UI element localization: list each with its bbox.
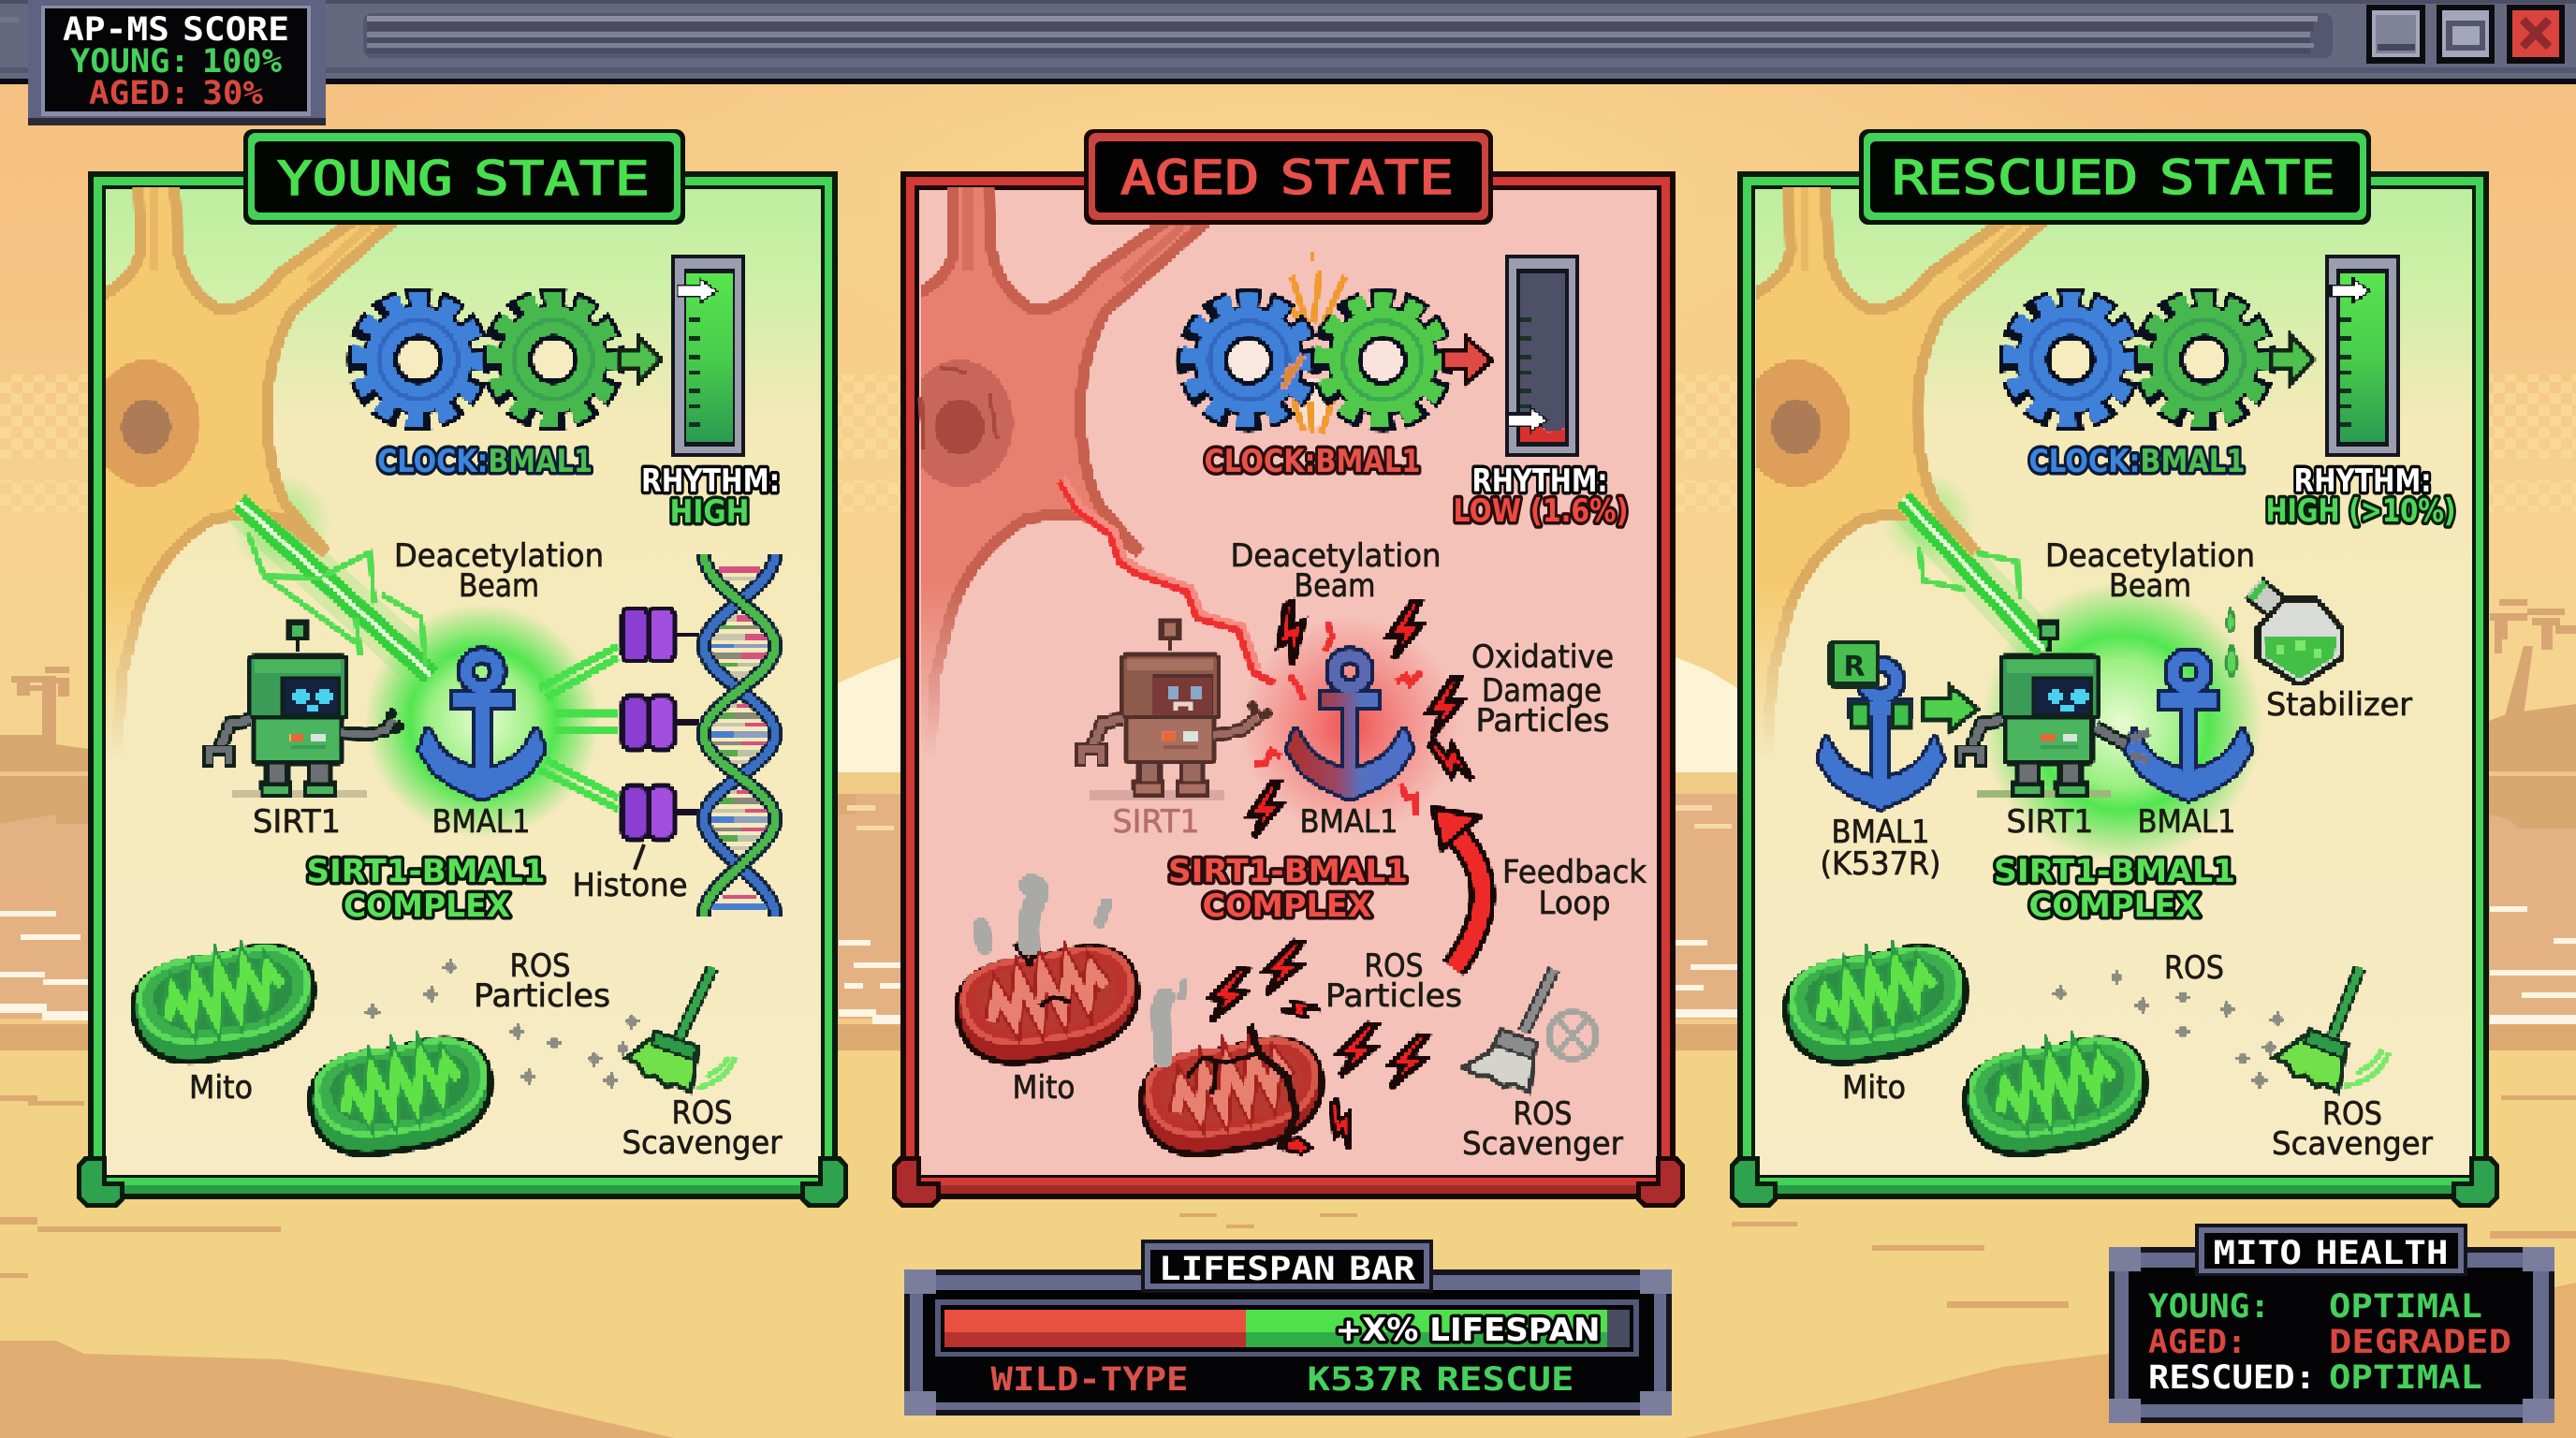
young labels: ROS — [672, 1094, 732, 1132]
rescued labels: RHYTHM: — [2293, 462, 2432, 500]
aged labels: Particles — [1475, 702, 1610, 740]
young labels: Deacetylation — [394, 537, 604, 575]
clock gears — [2000, 289, 2275, 430]
rescued labels: COMPLEX — [2029, 888, 2200, 925]
red output arrow — [1443, 337, 1491, 383]
aged labels: Damage — [1482, 672, 1602, 710]
top window bar — [0, 0, 2576, 84]
young labels: Scavenger — [622, 1124, 783, 1162]
young labels: BMAL1 — [432, 803, 530, 841]
lifespan bar tab — [1141, 1240, 1433, 1293]
aged labels: Oxidative — [1471, 638, 1614, 676]
close button — [2507, 5, 2565, 64]
histone links — [539, 646, 618, 809]
rescued labels: BMAL1 — [1831, 814, 1930, 851]
mitochondria — [136, 948, 488, 1152]
degraded mitochondria — [959, 944, 1319, 1152]
lifespan bar HUD — [904, 1240, 1672, 1416]
young labels: HIGH — [670, 493, 749, 531]
young labels: Histone — [573, 867, 687, 904]
lifespan bar HUD: WILD-TYPE — [990, 1361, 1189, 1399]
rescued labels: SIRT1-BMAL1 — [1994, 853, 2235, 890]
rescued labels: Deacetylation — [2045, 537, 2255, 575]
aged labels: CLOCK:BMAL1 — [1204, 443, 1421, 480]
mito health HUD — [2109, 1224, 2554, 1423]
aged labels: Feedback — [1502, 854, 1647, 891]
neuron — [92, 178, 393, 768]
ROS particles — [365, 960, 639, 1088]
robot claw — [2130, 732, 2149, 760]
young glow — [229, 473, 599, 838]
score readout: YOUNG: 100% — [70, 43, 282, 81]
rescued labels: ROS — [2164, 949, 2224, 987]
minimize button — [2366, 5, 2425, 64]
aged title tab: AGED STATE — [1120, 151, 1454, 205]
score readout: AGED: 30% — [89, 75, 263, 112]
young labels — [189, 443, 783, 1162]
rescued labels: HIGH (>10%) — [2265, 492, 2456, 530]
rhythm gauge high — [672, 255, 746, 456]
output arrow — [2272, 337, 2313, 382]
stabilizer flask — [2227, 582, 2342, 683]
aged artwork — [905, 178, 1596, 1153]
panel: young state — [77, 129, 848, 1208]
rescued labels: Stabilizer — [2266, 686, 2412, 724]
rhythm gauge high — [2325, 255, 2399, 456]
aged glow — [1239, 378, 1460, 836]
aged labels: COMPLEX — [1202, 888, 1372, 925]
broom scavenger — [627, 968, 735, 1092]
young frame — [77, 171, 848, 1208]
aged labels: RHYTHM: — [1471, 462, 1608, 500]
robot SIRT1 — [1960, 623, 2135, 798]
anchor BMAL1 — [420, 655, 544, 799]
robot SIRT1 — [209, 623, 402, 798]
lifespan bar tab: LIFESPAN BAR — [1159, 1251, 1416, 1288]
maximize button — [2437, 5, 2495, 64]
rescued labels: Beam — [2109, 567, 2191, 605]
K537R anchor — [1819, 642, 1942, 808]
rescued frame — [1730, 171, 2499, 1208]
mito health tab — [2195, 1224, 2467, 1276]
smoke — [981, 885, 1184, 1058]
aged labels: Deacetylation — [1230, 537, 1442, 575]
oxidative bolts — [1250, 601, 1481, 837]
young labels: Mito — [189, 1069, 253, 1107]
rescued labels: BMAL1 — [2138, 803, 2235, 841]
aged title tab — [1084, 129, 1493, 225]
status rows: DEGRADED — [2329, 1324, 2511, 1361]
panel: rescued state — [1730, 129, 2499, 1208]
robot SIRT1 damaged — [1081, 622, 1271, 800]
disabled broom — [1464, 970, 1596, 1092]
panel: aged state — [892, 129, 1685, 1208]
ROS particles — [2053, 970, 2285, 1088]
clock gears — [348, 289, 623, 430]
score readout: AP-MS SCORE — [63, 11, 289, 49]
rescued artwork — [1742, 178, 2399, 1152]
broom scavenger — [2275, 968, 2389, 1092]
damaged neuron — [905, 178, 1207, 768]
young labels: SIRT1-BMAL1 — [307, 853, 545, 890]
DNA helix — [704, 553, 775, 916]
histones — [622, 609, 698, 839]
aged labels: Particles — [1325, 977, 1462, 1015]
ROS bolts — [1207, 938, 1428, 1153]
mito health tab: MITO HEALTH — [2213, 1235, 2449, 1272]
failed jagged beam — [1059, 477, 1274, 683]
aged labels: Mito — [1013, 1069, 1075, 1107]
aged labels: Loop — [1539, 885, 1610, 922]
young title tab — [243, 129, 685, 225]
output arrow — [619, 337, 661, 382]
young labels: RHYTHM: — [641, 462, 780, 500]
deacetylation beam — [239, 502, 431, 675]
status rows: AGED: — [2148, 1324, 2247, 1361]
rescued glow — [1881, 473, 2262, 863]
mitochondria — [1788, 949, 2143, 1152]
rescued labels: SIRT1 — [2007, 803, 2093, 841]
score readout — [63, 11, 289, 112]
rescued labels: R — [1843, 651, 1866, 683]
lifespan bar HUD: K537R RESCUE — [1307, 1361, 1574, 1399]
young labels: ROS — [509, 947, 571, 985]
young title tab: YOUNG STATE — [277, 152, 650, 206]
bar track — [935, 1299, 1639, 1357]
deacetylation beam — [1903, 498, 2043, 649]
status rows: OPTIMAL — [2329, 1288, 2482, 1326]
rescued labels: Mito — [1842, 1069, 1906, 1107]
rescued title tab: RESCUED STATE — [1892, 151, 2335, 205]
aged labels: Beam — [1294, 567, 1376, 605]
rescued labels: (K537R) — [1820, 845, 1941, 883]
transfer arrow — [1924, 687, 1977, 730]
status rows — [2148, 1288, 2511, 1397]
aged labels: LOW (1.6%) — [1453, 492, 1629, 530]
young labels: Beam — [459, 567, 539, 605]
rescued labels: ROS — [2322, 1095, 2382, 1133]
status rows: YOUNG: — [2148, 1288, 2270, 1326]
clock gears with sparks — [1178, 253, 1453, 433]
damaged anchor — [1288, 655, 1412, 799]
aged labels: SIRT1 — [1112, 803, 1200, 841]
palm and surf details — [11, 599, 2576, 746]
aged labels: Scavenger — [1462, 1125, 1623, 1163]
young labels: Particles — [474, 977, 610, 1015]
rhythm gauge low — [1504, 255, 1578, 456]
lifespan bar HUD: +X% LIFESPAN — [1335, 1312, 1601, 1349]
aged labels: SIRT1-BMAL1 — [1168, 853, 1408, 890]
bound anchor BMAL1 — [2127, 656, 2250, 800]
aged labels: ROS — [1365, 947, 1423, 985]
AP-MS score HUD — [0, 0, 326, 125]
aged frame — [892, 171, 1685, 1208]
young labels: CLOCK:BMAL1 — [377, 443, 593, 480]
rescued title tab — [1859, 129, 2371, 225]
healthy neuron — [1742, 178, 2043, 768]
aged labels — [1013, 443, 1647, 1163]
status rows: OPTIMAL — [2329, 1359, 2482, 1397]
rescued labels: Scavenger — [2272, 1125, 2433, 1163]
rescued labels — [1820, 443, 2456, 1163]
aged labels: ROS — [1513, 1095, 1573, 1133]
young artwork — [92, 178, 775, 1152]
feedback arrow — [1433, 808, 1483, 968]
young labels: SIRT1 — [253, 803, 341, 841]
aged labels: BMAL1 — [1299, 803, 1398, 841]
young labels: COMPLEX — [344, 888, 510, 925]
rescued labels: CLOCK:BMAL1 — [2029, 443, 2245, 480]
status rows: RESCUED: — [2148, 1359, 2316, 1397]
